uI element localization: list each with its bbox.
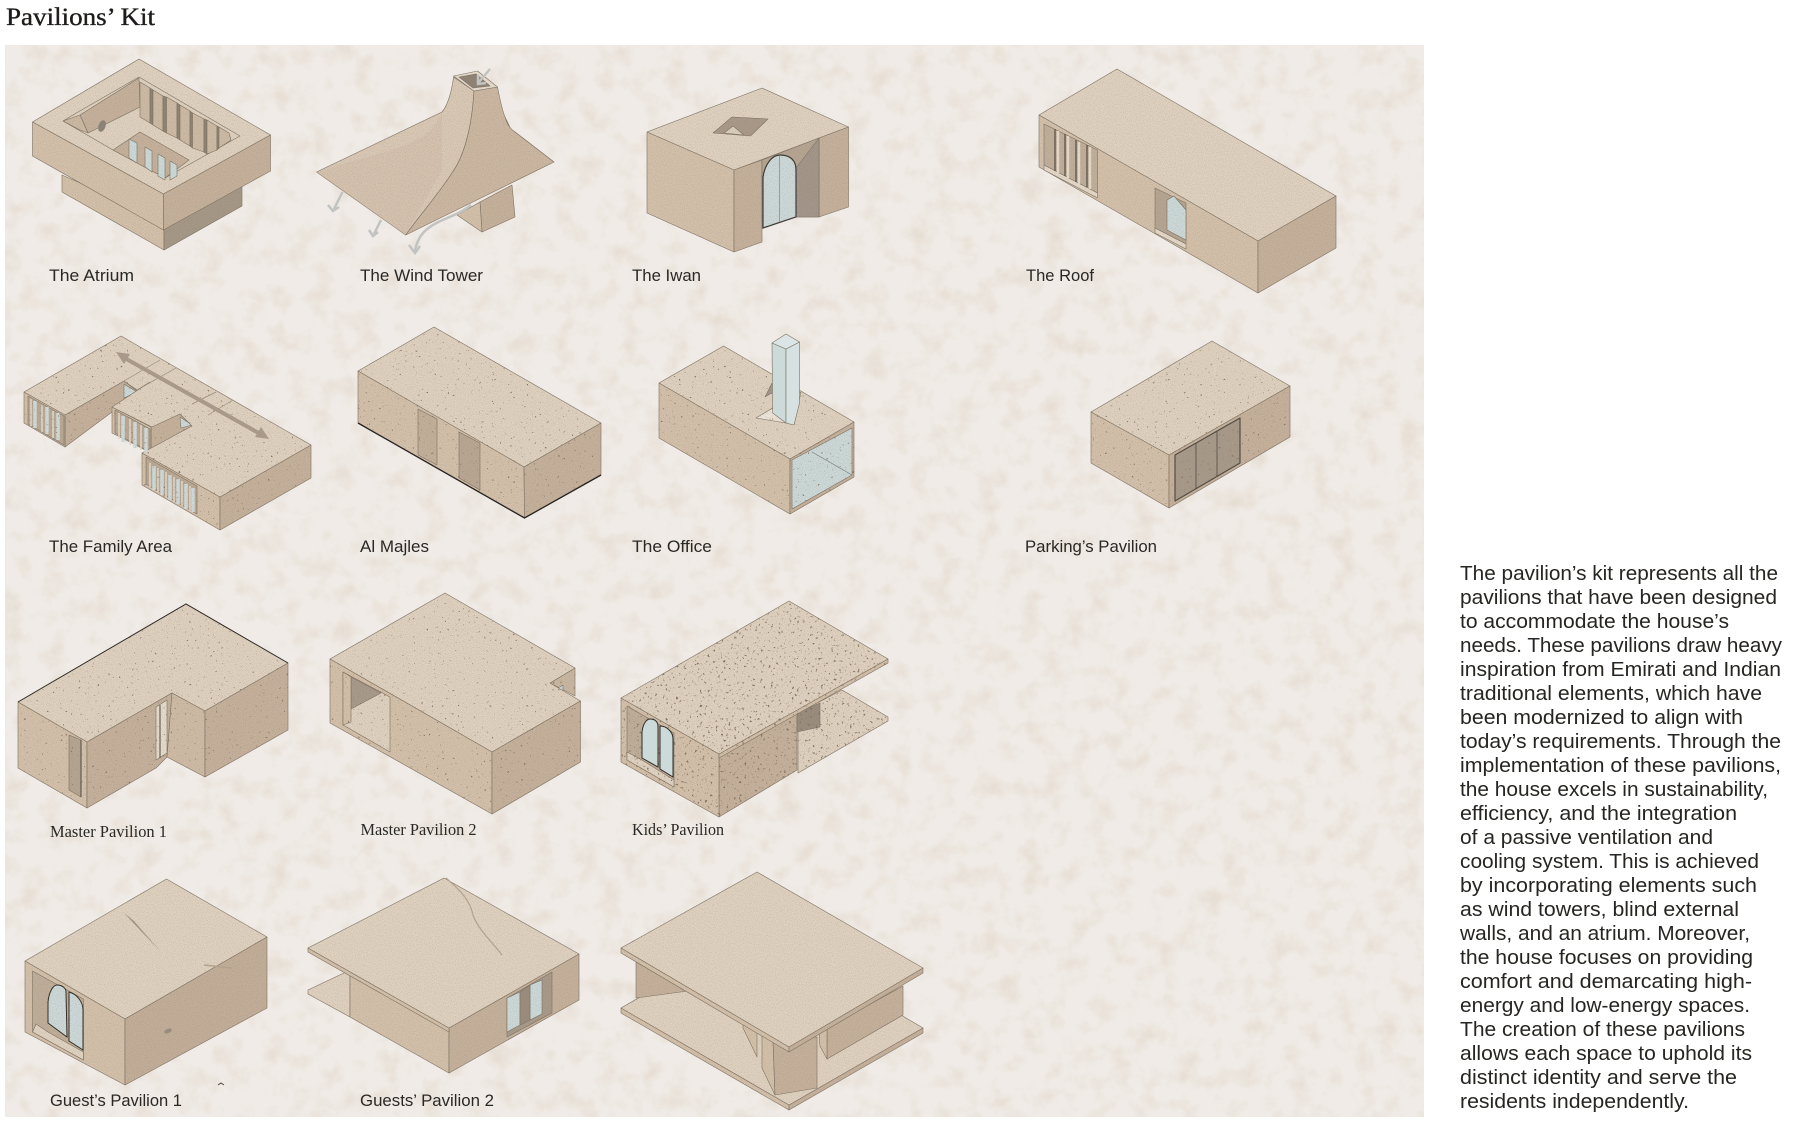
description text block: to accommodate the house’s — [1460, 610, 1729, 633]
description text block: walls, and an atrium. Moreover, — [1459, 922, 1750, 945]
description text block: the house focuses on providing — [1460, 946, 1753, 969]
label: The Wind Tower — [360, 266, 483, 285]
lower slab — [621, 930, 923, 1110]
pavilion: Parking's Pavilion — [1025, 341, 1290, 556]
drawing: atrium block — [32, 59, 270, 250]
label: The Family Area — [49, 537, 173, 556]
window: arched glass — [642, 719, 673, 777]
label: Parking’s Pavilion — [1025, 537, 1157, 556]
drawing: wind tower — [316, 71, 554, 235]
label: Guest’s Pavilion 1 — [50, 1091, 182, 1110]
drawing: guest pavilion 2 — [308, 878, 579, 1073]
label: The Roof — [1026, 266, 1094, 285]
description text block: been modernized to align with — [1460, 706, 1743, 729]
drawing: master pavilion 1 — [18, 604, 288, 808]
drawing: master pavilion 2 — [330, 593, 580, 814]
description text block: the house excels in sustainability, — [1460, 778, 1768, 801]
drawing: iwan — [647, 88, 848, 252]
description text block: implementation of these pavilions, — [1460, 754, 1781, 777]
description text block — [1459, 562, 1783, 1113]
pavilion: Master Pavilion 1 — [18, 604, 288, 841]
description text block: energy and low-energy spaces. — [1460, 994, 1750, 1017]
pavilion: The Iwan — [632, 88, 848, 285]
description text block: of a passive ventilation and — [1460, 826, 1713, 849]
pavilion: Master Pavilion 2 — [330, 593, 580, 839]
pavilion: Guest's Pavilion 1 — [25, 879, 267, 1110]
drawing: office — [659, 346, 854, 514]
description text block: residents independently. — [1460, 1090, 1689, 1113]
pavilion: unlabeled open-plan pavilion — [621, 872, 923, 1110]
label: The Iwan — [632, 266, 701, 285]
drawing: roof block — [1039, 69, 1336, 293]
walls — [636, 962, 903, 1095]
description text block: pavilions that have been designed — [1460, 586, 1777, 609]
pavilion: Guests' Pavilion 2 — [308, 878, 579, 1110]
chimney shaft — [772, 334, 800, 425]
description text block: needs. These pavilions draw heavy — [1460, 634, 1783, 657]
pavilion: The Roof — [1026, 69, 1336, 293]
pavilion: Kids' Pavilion — [621, 601, 888, 839]
label: The Atrium — [49, 266, 134, 285]
drawing: kids pavilion — [621, 601, 888, 817]
description text block: The creation of these pavilions — [1460, 1018, 1745, 1041]
drawing: al majles — [358, 327, 601, 518]
panel: textured kit background — [5, 45, 1424, 1117]
description text block: efficiency, and the integration — [1460, 802, 1737, 825]
label: Al Majles — [360, 537, 429, 556]
drawing: family area — [24, 336, 311, 530]
description text block: by incorporating elements such — [1460, 874, 1757, 897]
arrow: double-headed circulation — [116, 352, 269, 439]
pavilion: The Atrium — [32, 59, 270, 285]
upper slab — [621, 872, 923, 1052]
pavilion: The Family Area — [24, 336, 311, 556]
arrows: airflow — [328, 69, 490, 253]
label: The Office — [632, 537, 712, 556]
label: Master Pavilion 2 — [360, 820, 476, 839]
label: Kids’ Pavilion — [632, 820, 724, 839]
description text block: traditional elements, which have — [1460, 682, 1762, 705]
description text block: as wind towers, blind external — [1460, 898, 1739, 921]
description text block: cooling system. This is achieved — [1460, 850, 1759, 873]
description text block: allows each space to uphold its — [1460, 1042, 1752, 1065]
pavilion: The Wind Tower — [316, 69, 554, 285]
description text block: The pavilion’s kit represents all the — [1460, 562, 1778, 585]
description text block: comfort and demarcating high- — [1460, 970, 1752, 993]
description text block: inspiration from Emirati and Indian — [1460, 658, 1781, 681]
description text block: distinct identity and serve the — [1460, 1066, 1737, 1089]
pavilion: The Office — [632, 334, 854, 556]
description text block: today’s requirements. Through the — [1460, 730, 1781, 753]
title: Pavilions’ Kit — [6, 4, 155, 31]
drawing: guest pavilion 1 — [25, 879, 267, 1085]
pavilion: Al Majles — [358, 327, 601, 556]
drawing: parking — [1091, 341, 1290, 508]
label: Master Pavilion 1 — [50, 822, 167, 841]
label: Guests’ Pavilion 2 — [360, 1091, 494, 1110]
